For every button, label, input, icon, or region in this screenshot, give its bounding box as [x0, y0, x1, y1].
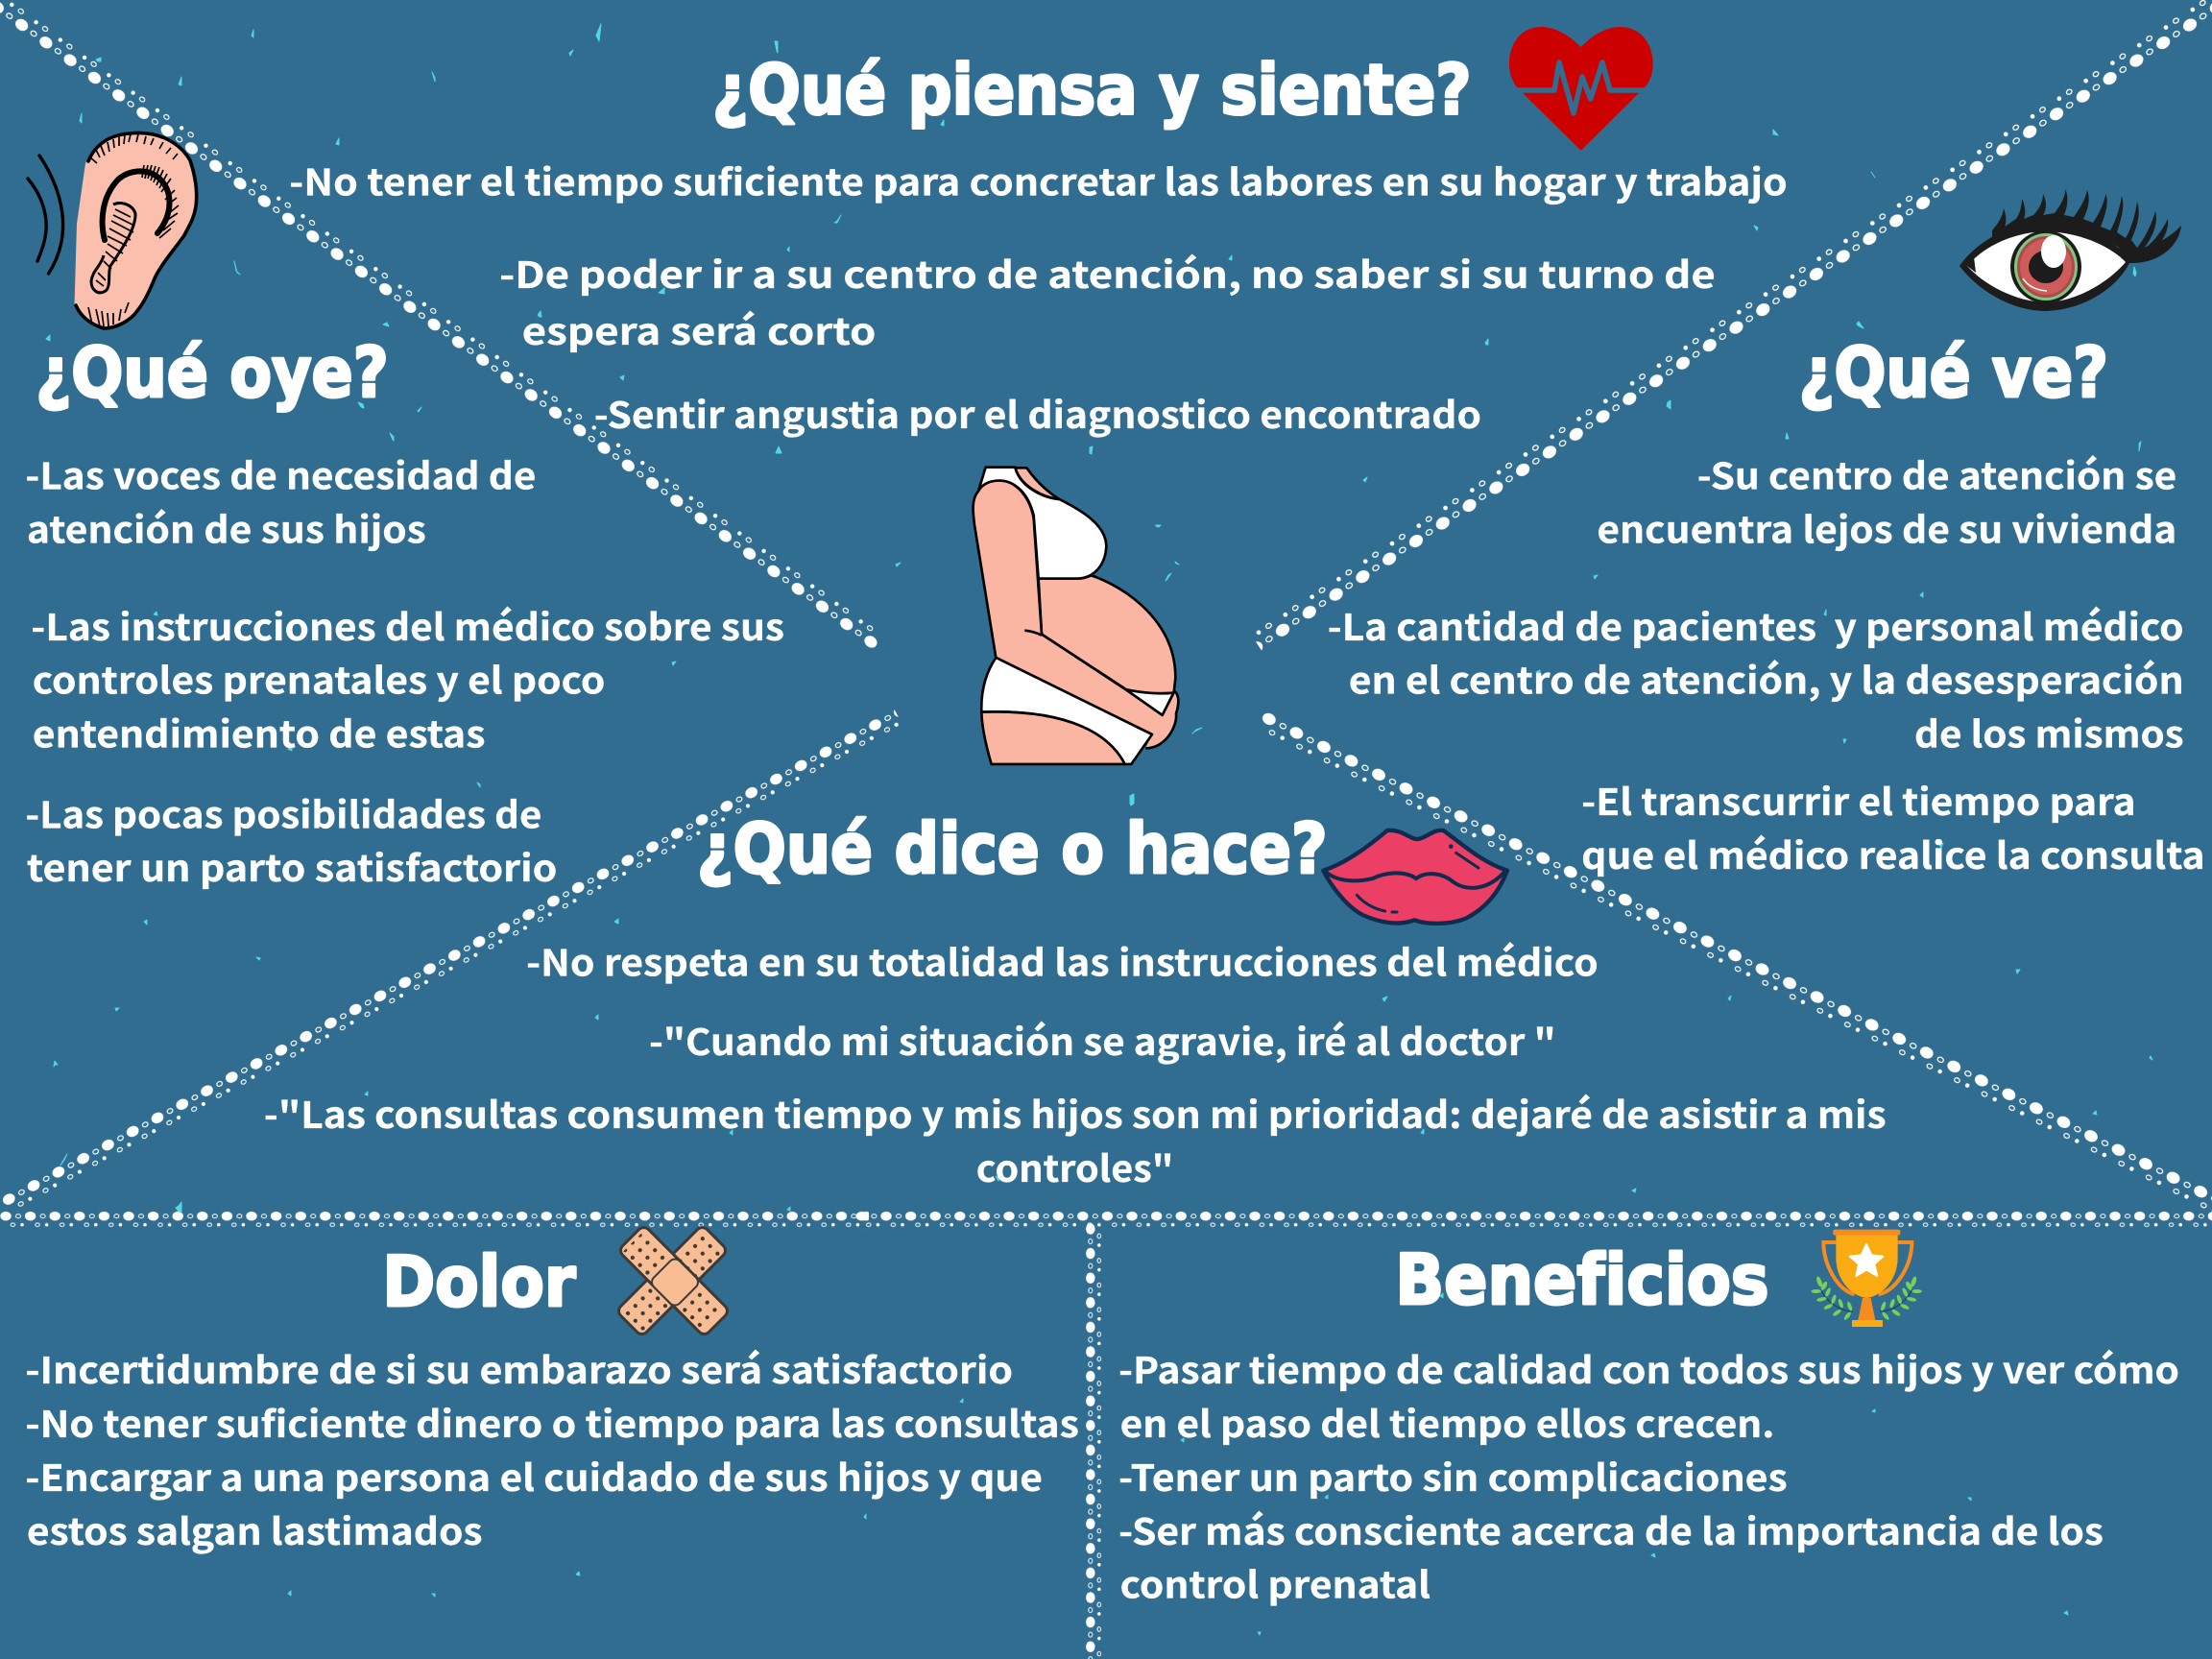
dotted divider: bottom-left diagonal [0, 709, 904, 1216]
text block: qué dice o hace: -"Las consultas consumen tiempo y mis hijos son mi prioridad: dejaré de asistir a mis [264, 1086, 1887, 1139]
text block: beneficios: -Ser más consciente acerca de la importancia de los [1118, 1503, 2104, 1555]
panel: qué oye [25, 132, 784, 892]
text block: qué oye: tener un parto satisfactorio [27, 839, 557, 892]
text block: dolor: estos salgan lastimados [27, 1503, 483, 1555]
heading: qué ve: ¿Qué ve? [1799, 332, 2108, 413]
text block: qué ve: de los mismos [1914, 706, 2184, 758]
text block: qué oye: entendimiento de estas [33, 706, 486, 758]
heading: dolor: Dolor [382, 1241, 576, 1322]
icon: trophy [1811, 1230, 1922, 1327]
text block: beneficios: en el paso del tiempo ellos crecen. [1120, 1395, 1774, 1448]
text block: qué oye: atención de sus hijos [27, 501, 426, 553]
heading: qué oye: ¿Qué oye? [36, 332, 389, 413]
panel: beneficios [1118, 1230, 2179, 1609]
text block: piensa y siente: -De poder ir a su centro de atención, no saber si su turno de [499, 246, 1716, 299]
text block: qué ve: en el centro de atención, y la desesperación [1349, 652, 2184, 705]
text block: qué ve: -El transcurrir el tiempo para [1581, 773, 2136, 826]
illustration: pregnant woman [974, 468, 1178, 764]
heading: qué piensa y siente: ¿Qué piensa y siente? [712, 50, 1472, 131]
text block: beneficios: control prenatal [1120, 1556, 1431, 1609]
text block: qué ve: que el médico realice la consulta [1581, 827, 2205, 879]
panel: dolor [25, 1225, 1079, 1555]
panel: qué piensa y siente [289, 27, 1788, 439]
text block: piensa y siente: -No tener el tiempo suficiente para concretar las labores en su hogar y trabajo [289, 154, 1788, 205]
dotted divider: vertical [1086, 1223, 1105, 1659]
dotted divider: top-right diagonal [1248, 0, 2212, 651]
icon: bandage [616, 1225, 730, 1336]
icon: ear [28, 132, 197, 328]
dotted divider: horizontal left [0, 1212, 869, 1231]
text block: qué ve: -La cantidad de pacientes y personal médico [1328, 598, 2184, 651]
heading: qué dice o hace: ¿Qué dice o hace? [697, 808, 1328, 889]
icon: eye [1960, 189, 2181, 311]
text block: qué dice o hace: -No respeta en su totalidad las instrucciones del médico [526, 934, 1599, 987]
text block: dolor [25, 1341, 1079, 1555]
text block: qué oye: -Las voces de necesidad de [25, 447, 536, 500]
text block: beneficios [1118, 1341, 2179, 1609]
text block: qué ve: encuentra lejos de su vivienda [1597, 501, 2176, 553]
text block: dolor: -Incertidumbre de si su embarazo será satisfactorio [25, 1341, 1013, 1394]
heading: beneficios: Beneficios [1395, 1239, 1769, 1320]
dotted divider: horizontal right [855, 1212, 2212, 1231]
text block: dolor: -No tener suficiente dinero o tiempo para las consultas [25, 1395, 1079, 1448]
text block: beneficios: -Tener un parto sin complicaciones [1118, 1449, 1788, 1502]
text block: qué dice o hace: -"Cuando mi situación se agravie, iré al doctor " [649, 1013, 1556, 1066]
text block: qué ve: -Su centro de atención se [1697, 447, 2176, 500]
icon: lips [1323, 830, 1507, 924]
dotted divider: bottom-right diagonal [1255, 710, 2212, 1220]
text block: piensa y siente: -Sentir angustia por el diagnostico encontrado [594, 386, 1481, 439]
text block: qué oye: -Las instrucciones del médico sobre sus [31, 598, 784, 651]
panel: qué ve [1328, 189, 2205, 879]
dotted divider: top-left diagonal [0, 0, 887, 651]
text block: qué ve [1328, 447, 2205, 879]
text block: qué oye [25, 447, 784, 892]
text block: beneficios: -Pasar tiempo de calidad con todos sus hijos y ver cómo [1118, 1341, 2179, 1394]
text block: qué oye: controles prenatales y el poco [33, 652, 605, 705]
text block: piensa y siente: espera será corto [522, 302, 876, 355]
text block: piensa y siente [289, 154, 1788, 439]
text block: dolor: -Encargar a una persona el cuidado de sus hijos y que [25, 1449, 1043, 1502]
icon: heart with pulse [1509, 27, 1653, 151]
text block: qué oye: -Las pocas posibilidades de [25, 785, 541, 838]
panel: qué dice o hace [264, 808, 1887, 1192]
text block: qué dice o hace: controles" [976, 1140, 1173, 1192]
text block: qué dice o hace [264, 934, 1887, 1192]
